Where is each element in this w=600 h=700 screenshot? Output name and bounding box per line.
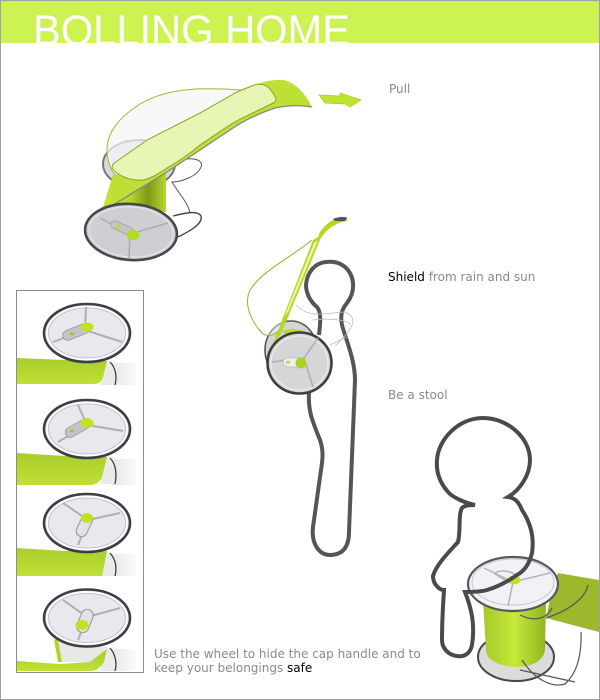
front wheel	[268, 332, 332, 394]
back wheel	[265, 321, 317, 379]
canopy transparent part	[107, 89, 240, 180]
stool body	[483, 600, 546, 667]
illustration: rolling home with pulled shield	[83, 80, 312, 263]
green side panel	[546, 573, 599, 632]
thin straps	[296, 305, 353, 346]
front wheel	[83, 201, 179, 263]
panel: wheel detail sequence	[16, 290, 144, 672]
illustration: stool with seated person	[433, 418, 599, 685]
wheel knob	[296, 358, 306, 368]
canopy underside edge	[113, 106, 312, 205]
body cylinder	[102, 172, 166, 212]
thumbnail 3	[17, 494, 140, 576]
thumbnail 1	[17, 304, 140, 385]
straps	[520, 585, 588, 685]
thumbnail 4	[17, 590, 140, 671]
person silhouette standing	[306, 262, 355, 555]
stool knob	[508, 576, 520, 584]
green body top	[283, 329, 303, 335]
caption: keep your belongings safe: keep your belongings safe	[154, 661, 312, 675]
title: BOLLING HOME	[33, 7, 350, 55]
label: Be a stool: Be a stool	[388, 388, 448, 402]
canopy green body	[113, 80, 312, 205]
thumbnail 2	[17, 400, 140, 485]
back wheel	[103, 140, 175, 188]
wheel knob	[126, 230, 140, 240]
caption: use the wheel: Use the wheel to hide the cap handle and to	[154, 647, 421, 661]
illustration: side view with shield	[248, 217, 353, 394]
label: Shield from rain and sun: Shield from rain and sun	[388, 270, 535, 284]
upper strap	[170, 159, 202, 213]
title banner	[1, 1, 599, 43]
person silhouette seated	[433, 418, 533, 656]
shield strip	[272, 217, 347, 346]
canopy light panel	[112, 84, 276, 180]
shield loop	[248, 240, 312, 335]
label: Pull: Pull	[389, 82, 410, 96]
lower strap	[173, 213, 201, 237]
stool top wheel	[468, 557, 558, 611]
lower wheel	[478, 633, 554, 681]
arrow: pull direction	[319, 93, 361, 107]
